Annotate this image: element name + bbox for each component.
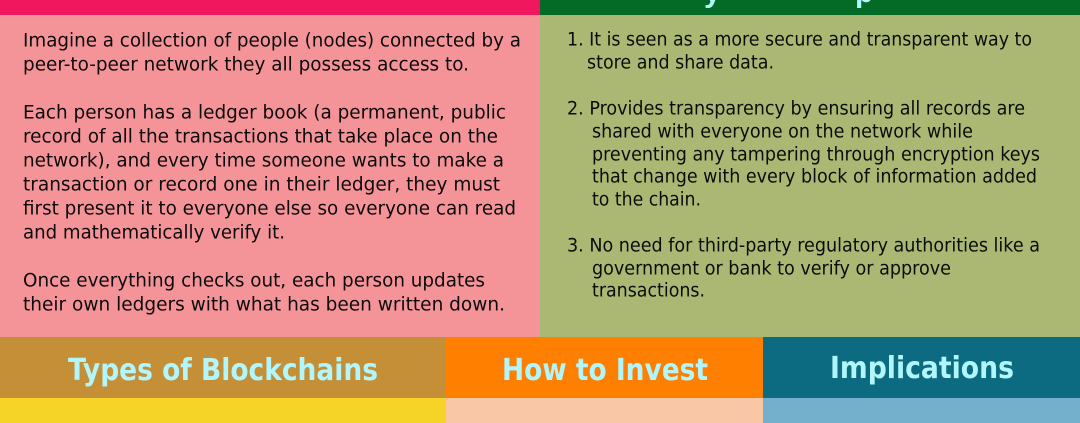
text block: numbered reasons (567, 30, 1040, 302)
text block: how it works: Each person has a ledger book (a permanent, public (23, 102, 506, 124)
section: how to invest (446, 337, 763, 423)
text block: how it works: network), and every time someone wants to make a (23, 150, 504, 172)
text block: numbered reasons: 3. No need for third-party regulatory authorities like a (567, 236, 1040, 256)
header band (763, 337, 1080, 398)
heading: Types of Blockchains (68, 353, 378, 388)
clipped heading letters (704, 0, 873, 9)
text block: how it works: Imagine a collection of people (nodes) connected by a (23, 30, 521, 52)
content band (446, 398, 763, 423)
header band (446, 337, 763, 398)
content band (0, 398, 446, 423)
text block: numbered reasons: government or bank to verify or approve (592, 258, 951, 280)
header band (0, 337, 446, 398)
text block: how it works: peer-to-peer network they all possess access to. (23, 54, 469, 76)
text block: how it works: record of all the transactions that take place on the (23, 126, 498, 148)
content band (763, 398, 1080, 423)
text block: how it works: Once everything checks out, each person updates (23, 270, 485, 292)
left panel background (0, 15, 540, 337)
heading: How to Invest (502, 353, 708, 388)
text block: how it works: and mathematically verify it. (23, 222, 285, 244)
text block: numbered reasons: that change with every block of information added (592, 166, 1037, 188)
text block: numbered reasons: transactions. (592, 280, 705, 302)
text block: numbered reasons: to the chain. (592, 190, 701, 210)
section: implications (763, 337, 1080, 423)
text block: how it works: first present it to everyone else so everyone can read (23, 198, 516, 220)
right header band (540, 0, 1080, 15)
text block: numbered reasons: store and share data. (587, 52, 774, 74)
text block: numbered reasons: 1. It is seen as a more secure and transparent way to (567, 30, 1032, 50)
text block: how it works: their own ledgers with what has been written down. (23, 294, 505, 316)
panel: how it works (0, 0, 540, 337)
text block: numbered reasons: 2. Provides transparency by ensuring all records are (567, 98, 1025, 120)
text block: numbered reasons: shared with everyone on the network while (592, 122, 973, 142)
text block: how it works: transaction or record one in their ledger, they must (23, 174, 500, 196)
right panel background (540, 15, 1080, 337)
text block: how it works (23, 30, 521, 316)
heading: Implications (830, 351, 1014, 386)
section: types of blockchains (0, 337, 446, 423)
left header band (0, 0, 540, 15)
panel: why it is important (540, 0, 1080, 337)
text block: numbered reasons: preventing any tampering through encryption keys (592, 144, 1040, 166)
